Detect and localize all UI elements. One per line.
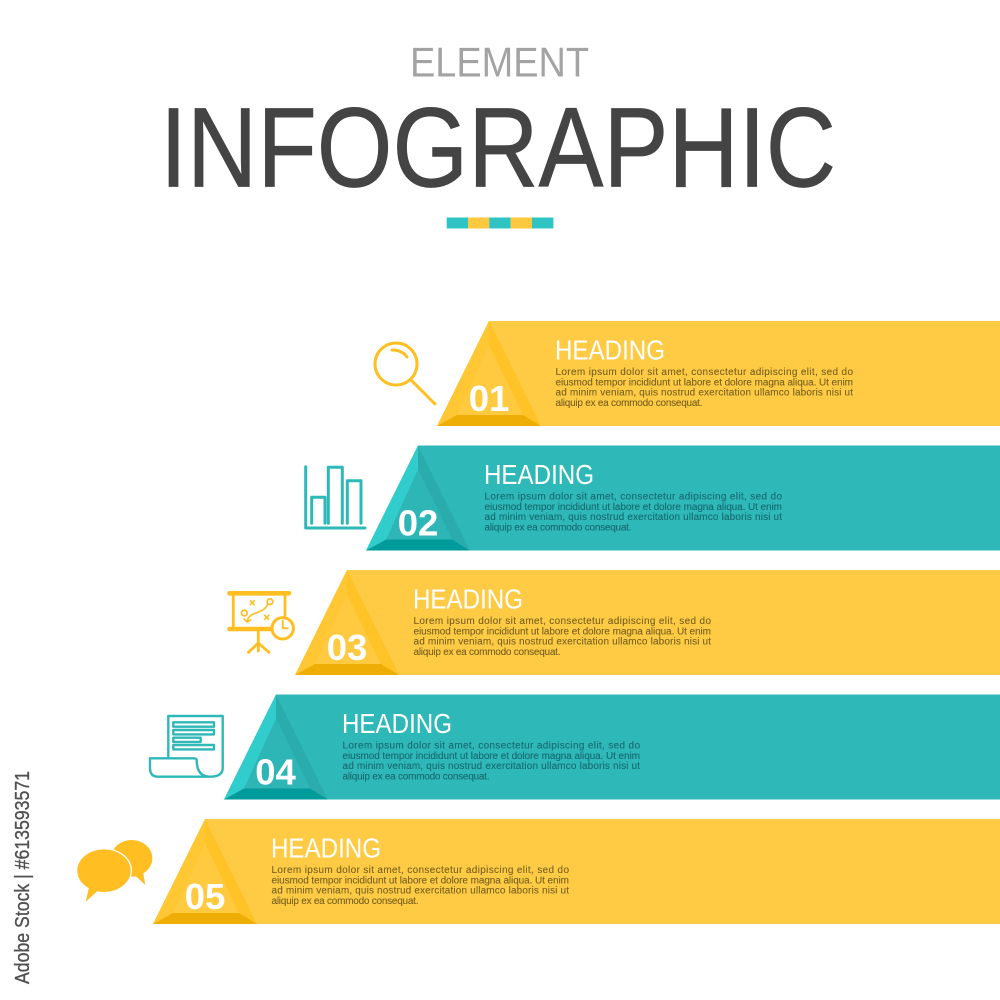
number: 04 [255,752,296,792]
pyramid [295,570,399,675]
panel: step 01 [437,321,1000,426]
body text: eiusmod tempor incididunt ut labore et dolore magna aliqua. Ut enim [342,751,640,762]
title accent stripe [447,218,553,228]
pyramid [437,321,541,426]
panel: step 04 [224,694,1000,800]
body text [484,492,782,534]
body text: Lorem ipsum dolor sit amet, consectetur adipiscing elit, sed do [414,616,711,627]
heading: HEADING [484,459,594,490]
panel: step 02 [366,446,1000,550]
band [366,446,1000,550]
body text [342,740,640,782]
body text: Lorem ipsum dolor sit amet, consectetur adipiscing elit, sed do [272,865,569,876]
number: 02 [398,502,438,544]
body text: aliquip ex ea commodo consequat. [272,896,418,907]
body text: aliquip ex ea commodo consequat. [484,522,632,534]
number: 05 [185,876,225,917]
body text: aliquip ex ea commodo consequat. [342,772,490,782]
body text: ad minim veniam, quis nostrud exercitation ullamco laboris nisi ut [414,637,711,648]
icon: bar chart [306,467,365,528]
body text: eiusmod tempor incididunt ut labore et dolore magna aliqua. Ut enim [272,875,569,886]
body text [556,367,853,409]
body text: ad minim veniam, quis nostrud exercitation ullamco laboris nisi ut [484,512,782,523]
pyramid [366,446,470,550]
icon: document scroll [150,716,223,777]
body text: aliquip ex ea commodo consequat. [414,647,560,658]
body text: Lorem ipsum dolor sit amet, consectetur adipiscing elit, sed do [342,740,640,752]
body text: eiusmod tempor incididunt ut labore et dolore magna aliqua. Ut enim [556,377,853,388]
body text: ad minim veniam, quis nostrud exercitation ullamco laboris nisi ut [272,886,569,897]
band [295,570,1000,675]
band [437,321,1000,426]
heading: HEADING [555,334,665,366]
panel: step 03 [295,570,1000,675]
body text: eiusmod tempor incididunt ut labore et dolore magna aliqua. Ut enim [414,626,711,637]
body text [272,865,569,907]
pyramid [224,694,328,800]
band [224,694,1000,800]
heading: HEADING [271,832,381,864]
subtitle: ELEMENT [410,38,589,86]
body text: aliquip ex ea commodo consequat. [556,398,702,409]
panel: step 05 [153,819,1000,924]
body text: eiusmod tempor incididunt ut labore et dolore magna aliqua. Ut enim [484,502,782,513]
title: INFOGRAPHIC [160,84,836,210]
heading: HEADING [413,584,523,614]
icon: magnifying glass [375,343,435,404]
body text: ad minim veniam, quis nostrud exercitation ullamco laboris nisi ut [342,761,640,772]
body text: Lorem ipsum dolor sit amet, consectetur adipiscing elit, sed do [484,492,782,502]
body text [414,616,711,658]
body text: ad minim veniam, quis nostrud exercitation ullamco laboris nisi ut [556,388,853,399]
band [153,819,1000,924]
pyramid [153,819,257,924]
number: 03 [327,627,367,668]
body text: Lorem ipsum dolor sit amet, consectetur adipiscing elit, sed do [556,367,853,378]
icon: presentation board with clock [230,593,293,652]
icon: speech bubbles [76,840,152,902]
stock credit text: Adobe Stock | #613593571 [12,771,34,984]
heading: HEADING [342,708,452,739]
number: 01 [469,378,509,419]
